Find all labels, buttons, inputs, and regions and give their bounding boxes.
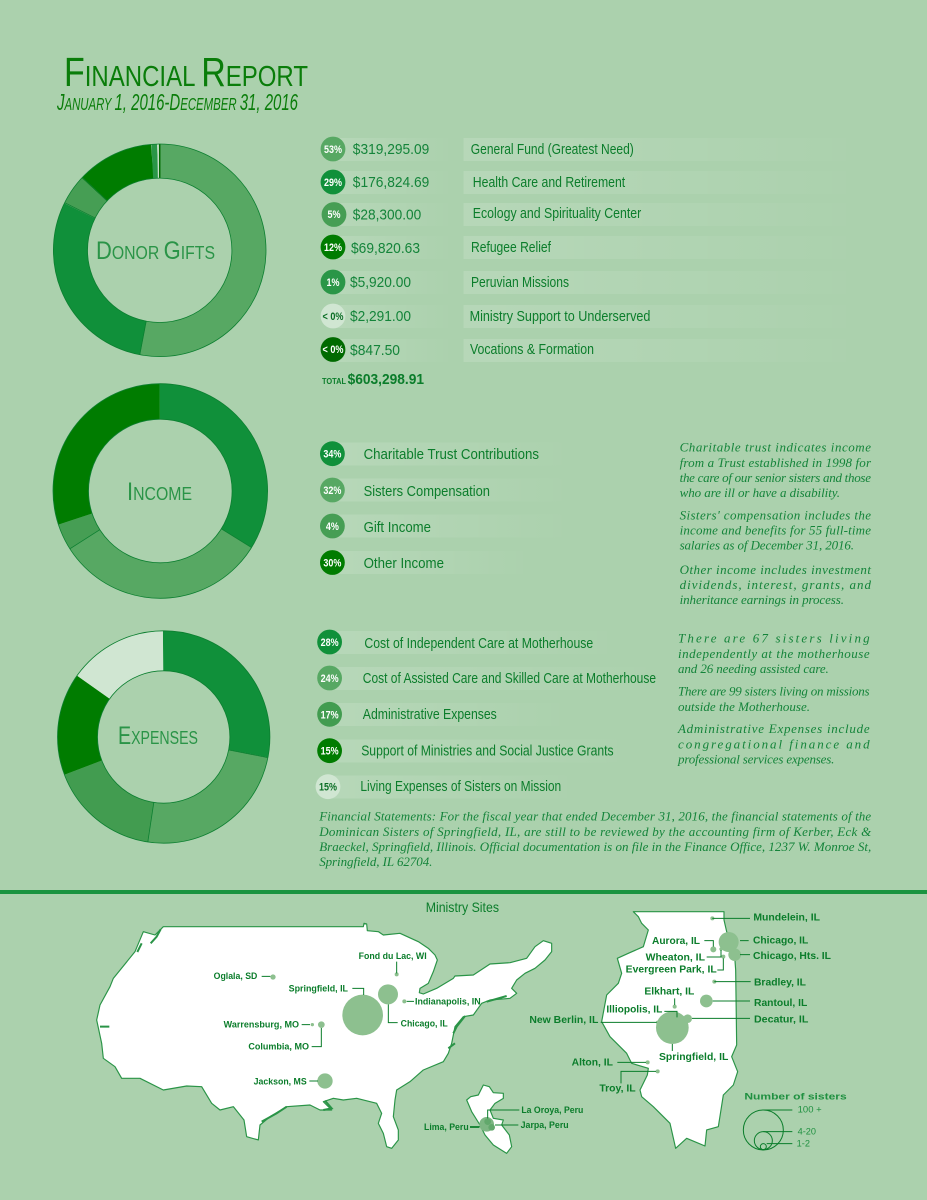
financial statements note: Dominican Sisters of Springfield, IL, are still to be reviewed by the accounting firm of Kerber, Eck &	[318, 824, 872, 839]
map labels: illinois: Bradley, IL	[754, 978, 806, 989]
financial statements note	[318, 808, 872, 869]
row: refugee relief: Refugee Relief	[471, 239, 552, 256]
row: administrative: 17%	[321, 709, 339, 721]
notes: expenses: professional services expenses.	[677, 752, 834, 766]
row: living expenses: 15%	[319, 782, 337, 794]
map labels: peru: Jarpa, Peru	[521, 1120, 569, 1130]
map labels: united states	[214, 951, 481, 1132]
row: charitable trust: Charitable Trust Contributions	[364, 446, 539, 463]
map labels: illinois: New Berlin, IL	[529, 1015, 598, 1026]
list: income	[320, 441, 572, 575]
map labels: united states: Warrensburg, MO	[224, 1020, 299, 1030]
notes: expenses: Administrative Expenses include	[677, 721, 870, 736]
map labels: united states: Lima, Peru	[424, 1122, 469, 1132]
financial statements note: Springfield, IL 62704.	[319, 854, 432, 869]
row: health care	[321, 170, 626, 194]
row: administrative	[317, 702, 497, 727]
heading: ministry sites: Ministry Sites	[426, 899, 499, 915]
map labels: united states: Fond du Lac, WI	[359, 951, 427, 961]
row: peruvian missions: Peruvian Missions	[471, 274, 569, 291]
notes: expenses: outside the Motherhouse.	[678, 699, 810, 714]
row: independent care	[317, 630, 593, 654]
donut chart: donor gifts	[53, 144, 266, 357]
map labels: peru	[521, 1105, 583, 1130]
row: charitable trust	[320, 441, 539, 466]
map labels: illinois: Chicago, Hts. IL	[753, 951, 831, 962]
row: sisters compensation: 32%	[323, 485, 342, 497]
notes: income: who are ill or have a disability.	[680, 485, 840, 500]
row: gift income	[320, 514, 431, 538]
map: peru	[467, 1085, 583, 1153]
map labels: illinois: Aurora, IL	[652, 936, 700, 947]
map labels: illinois: Troy, IL	[599, 1084, 636, 1095]
map labels: illinois: Elkhart, IL	[644, 987, 694, 998]
notes: income: inheritance earnings in process.	[680, 592, 844, 607]
row: gift income: 4%	[326, 521, 339, 533]
row: general fund: General Fund (Greatest Need)	[471, 141, 634, 158]
legend: number of sisters: Number of sisters	[744, 1091, 847, 1101]
map labels: united states: Chicago, IL	[401, 1018, 448, 1028]
map labels: peru: La Oroya, Peru	[521, 1105, 583, 1115]
row: gift income: Gift Income	[364, 519, 431, 536]
row: peruvian missions	[321, 270, 569, 294]
row: assisted care: 24%	[321, 673, 339, 685]
row: ministry support: < 0%	[322, 311, 344, 323]
row: support of ministries	[317, 738, 614, 763]
notes: income: from a Trust established in 1998 for	[680, 455, 872, 470]
notes: expenses: There are 99 sisters living on missions	[678, 684, 870, 698]
row: support of ministries: 15%	[321, 746, 339, 758]
row: general fund: 53%	[324, 144, 342, 156]
notes: income: the care of our senior sisters and those	[680, 470, 871, 485]
list: expenses	[316, 630, 660, 799]
map labels: united states: Springfield, IL	[289, 983, 348, 993]
map: illinois	[529, 912, 847, 1150]
notes: income: income and benefits for 55 full-time	[680, 522, 871, 538]
map labels: illinois: Rantoul, IL	[754, 998, 807, 1009]
map labels: illinois: Alton, IL	[572, 1057, 613, 1068]
total: $603,298.91	[348, 371, 424, 388]
notes: expenses	[677, 630, 870, 766]
map labels: united states: Oglala, SD	[214, 971, 258, 981]
row: general fund	[321, 137, 634, 161]
row: health care: $176,824.69	[353, 174, 429, 191]
title	[56, 49, 308, 115]
row: assisted care	[317, 666, 656, 690]
map labels: united states: Indianapolis, IN	[415, 997, 481, 1007]
legend: number of sisters: 4-20	[798, 1127, 816, 1137]
map labels: illinois: Chicago, IL	[753, 935, 808, 946]
notes: expenses: independently at the motherhouse	[678, 646, 870, 661]
row: other income: 30%	[323, 558, 342, 570]
row: vocations: Vocations & Formation	[470, 341, 594, 358]
donut chart: expenses	[58, 631, 270, 843]
row: ecology: 5%	[328, 209, 341, 221]
total: TOTAL	[322, 377, 346, 386]
row: assisted care: Cost of Assisted Care and Skilled Care at Motherhouse	[363, 670, 656, 687]
list: donor gifts	[321, 137, 864, 388]
title: FINANCIAL REPORT	[64, 49, 308, 95]
notes: income: Charitable trust indicates income	[680, 440, 871, 454]
row: ecology: $28,300.00	[353, 206, 421, 224]
row: other income: Other Income	[364, 555, 444, 572]
legend: number of sisters: 1-2	[797, 1139, 810, 1149]
row: independent care: Cost of Independent Care at Motherhouse	[364, 635, 593, 652]
row: health care: Health Care and Retirement	[473, 174, 626, 191]
row: charitable trust: 34%	[323, 448, 342, 460]
donut label: expenses: EXPENSES	[118, 722, 198, 750]
notes: income: dividends, interest, grants, and	[680, 577, 872, 592]
row: independent care: 28%	[321, 637, 339, 649]
row: health care: 29%	[324, 177, 342, 189]
row: refugee relief: $69,820.63	[351, 240, 420, 257]
row: living expenses: Living Expenses of Sisters on Mission	[360, 778, 561, 795]
notes: expenses: congregational finance and	[678, 736, 870, 752]
map labels: illinois: Springfield, IL	[659, 1052, 728, 1063]
notes: income: salaries as of December 31, 2016.	[680, 538, 854, 552]
notes: expenses: and 26 needing assisted care.	[678, 661, 829, 676]
row: ecology	[322, 202, 641, 227]
map labels: illinois: Illiopolis, IL	[606, 1005, 662, 1016]
row: ministry support: $2,291.00	[350, 308, 411, 325]
row: vocations: < 0%	[322, 344, 344, 356]
notes: income	[680, 440, 872, 607]
row: sisters compensation	[320, 478, 490, 502]
row: general fund: $319,295.09	[353, 141, 429, 158]
legend: number of sisters	[743, 1091, 847, 1150]
row: refugee relief: 12%	[324, 242, 342, 254]
map: united states	[97, 923, 552, 1148]
row: vocations: $847.50	[350, 342, 400, 359]
title: JANUARY 1, 2016-DECEMBER 31, 2016	[56, 89, 298, 115]
row: sisters compensation: Sisters Compensation	[364, 483, 490, 500]
map labels: united states: Jackson, MS	[254, 1076, 307, 1086]
row: refugee relief	[321, 235, 552, 259]
donut chart: income	[53, 384, 268, 598]
row: support of ministries: Support of Ministries and Social Justice Grants	[361, 742, 614, 760]
row: living expenses	[316, 774, 561, 799]
map labels: illinois: Wheaton, IL	[646, 952, 705, 963]
map labels: illinois	[529, 913, 831, 1095]
legend: number of sisters: 100 +	[798, 1104, 822, 1114]
map labels: illinois: Mundelein, IL	[753, 913, 820, 924]
map labels: united states: Columbia, MO	[248, 1041, 309, 1051]
row: ecology: Ecology and Spirituality Center	[473, 205, 641, 222]
row: other income	[320, 550, 444, 575]
notes: income: Other income includes investment	[680, 562, 871, 577]
financial statements note: Financial Statements: For the fiscal year that ended December 31, 2016, the financial statements of the	[318, 808, 871, 824]
row: peruvian missions: 1%	[326, 277, 340, 289]
row: ministry support	[321, 304, 650, 328]
notes: expenses: There are 67 sisters living	[678, 630, 870, 646]
row: peruvian missions: $5,920.00	[350, 274, 411, 291]
financial statements note: Braeckel, Springfield, Illinois. Official documentation is on file in the Finance Office, 1237 W. Monroe St,	[319, 839, 871, 854]
donut label: donor gifts: DONOR GIFTS	[96, 237, 215, 265]
donut label: income: INCOME	[127, 478, 192, 506]
row: administrative: Administrative Expenses	[363, 706, 497, 723]
map labels: illinois: Decatur, IL	[754, 1014, 808, 1025]
notes: income: Sisters' compensation includes the	[680, 508, 871, 522]
map labels: illinois: Evergreen Park, IL	[626, 964, 717, 975]
row: vocations	[321, 337, 594, 362]
row: ministry support: Ministry Support to Underserved	[470, 308, 650, 325]
